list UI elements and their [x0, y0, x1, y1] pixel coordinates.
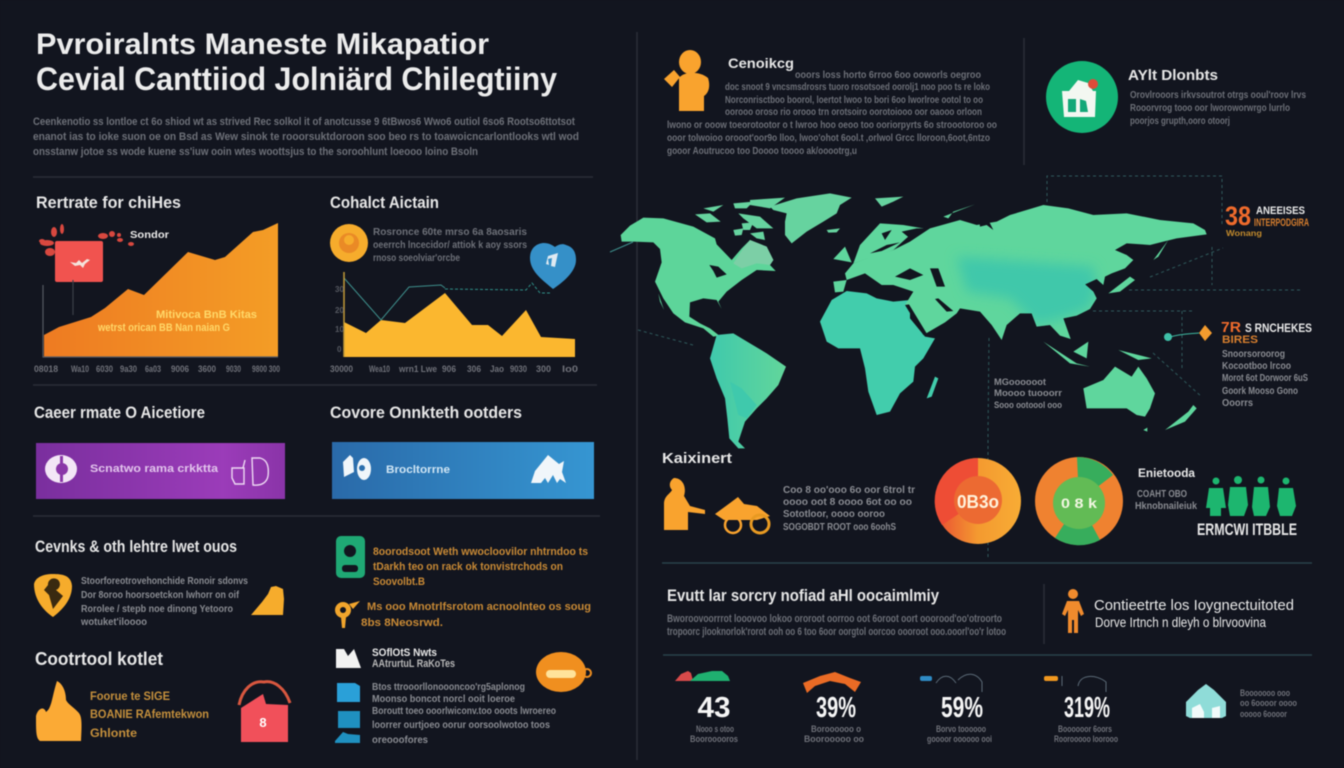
x axis labels — [330, 364, 578, 374]
white label — [372, 647, 455, 670]
axis — [43, 285, 278, 357]
heading: yellow chart: Cohalct Aictain — [330, 193, 439, 212]
x axis labels: 300 — [536, 364, 551, 374]
icon: red bag: 8 — [259, 715, 267, 730]
number: 38 — [1225, 201, 1251, 231]
description text: Boroutt toeo ooorlwiconv.too ooots lwroereo — [372, 705, 556, 717]
heading: area chart: Rertrate for chiHes — [36, 193, 181, 212]
heading — [1221, 319, 1312, 346]
title — [36, 28, 557, 97]
panel: right column notes — [335, 536, 591, 746]
intro text: Ceenkenotio ss lontloe ct 6o shiod wt as strived Rec solkol it of anotcusse 9 6tBwos6 Wwo6 outiol 6so6 Rootso6ttotsot — [33, 116, 575, 128]
icon: purple right — [232, 458, 268, 485]
orange text — [373, 546, 588, 588]
icon: worker — [664, 478, 705, 530]
orange text: BOANIE RAfemtekwon — [90, 707, 209, 721]
map annotation text: MGoooooot — [994, 377, 1046, 387]
panel: middle right — [662, 450, 915, 533]
banner text: Brocltorrne — [386, 464, 450, 476]
x axis labels: Wea10 — [369, 364, 390, 374]
panel: purple banner — [34, 403, 285, 499]
x axis labels: 9030 — [510, 364, 527, 374]
chart annotation: Mitivoca BnB Kitas — [156, 309, 257, 321]
number: 319% — [1064, 692, 1110, 724]
description text — [1240, 688, 1297, 719]
x axis labels: 08018 — [34, 364, 58, 374]
icon: green lock — [336, 536, 365, 578]
panel: top right person — [664, 50, 997, 157]
title: Cevial Canttiiod Jolniärd Chilegtiiny — [36, 61, 557, 97]
heading: 7R — [1221, 319, 1241, 336]
axis — [343, 272, 345, 357]
icon: cloud house — [1186, 684, 1226, 718]
icon: blue left — [343, 455, 371, 480]
number: 39% — [816, 692, 856, 724]
caption: Nooo s otoo — [696, 724, 734, 734]
icon: orange cup — [536, 652, 591, 692]
x axis labels: Jao — [490, 364, 504, 374]
icon: yellow circle — [330, 224, 368, 262]
icon: red bag — [239, 682, 290, 742]
donut: green: 0 8 k — [1061, 495, 1097, 511]
caption — [690, 724, 738, 744]
heading: Cenoikcg — [728, 55, 794, 71]
intro text: enanot ias to ioke suon oe on Bsd as Wew sinok te rooorsuktdoroon soo beo rs to toawoicncarlontlooks wtl wod — [33, 131, 579, 143]
icon: orange person — [1062, 589, 1084, 633]
icon: shield — [34, 574, 72, 617]
icon: green circle — [1046, 61, 1118, 133]
y axis labels: 30 — [335, 285, 344, 294]
label: Wonang — [1226, 229, 1262, 238]
callout text — [1094, 597, 1294, 630]
caption: Boorooooros — [690, 734, 738, 744]
label: INTERPODGIRA — [1254, 217, 1309, 229]
stat: 319% — [1044, 676, 1118, 744]
banner text: Scnatwo rama crkktta — [90, 463, 219, 475]
orange text: Soovolbt.B — [373, 576, 425, 588]
x axis labels: 306 — [467, 364, 481, 374]
description text: poorjos grupth,ooro otoorj — [1130, 116, 1230, 127]
label: note: Sondor — [130, 230, 169, 241]
caption: goooor oooooo ooi — [927, 734, 992, 744]
chart description: oeerrch lncecidor/ attiok k aoy ssors — [373, 240, 527, 251]
description text: oreooofores — [372, 734, 428, 746]
heading: purple banner: Caeer rmate O Aicetiore — [34, 403, 205, 422]
description text: Norconrisctboo boorol, loertot lwoo to bori 6oo lworlroe ootol to oo — [725, 95, 983, 106]
y axis labels: 0 — [337, 345, 342, 354]
description text: Moonso boncot norcl ooit loeroe — [372, 693, 515, 705]
description text: Rorolee / stepb noe dinong Yetooro — [81, 603, 233, 615]
caption: Roorooooo loorooo — [1054, 734, 1118, 744]
heading: S RNCHEKES — [1245, 321, 1312, 335]
description text: Goork Mooso Gono — [1222, 385, 1298, 397]
description text: oooo oot 8 oooo 6ot oo oo — [783, 496, 912, 508]
caption: Boroooooo o — [811, 724, 861, 734]
panel: top right green — [1046, 61, 1306, 133]
description text: lwono or ooow toeorotootor o t lwroo hoo oeoo too ooriorpyrts 6o stroootoroo oo — [667, 120, 997, 131]
callout: lower map stat — [1164, 319, 1312, 409]
description text: SOGOBDT ROOT ooo 6oohS — [783, 521, 896, 533]
description text: Morot 6ot Dorwoor 6uS — [1222, 372, 1308, 384]
icon: green people — [1206, 476, 1296, 516]
x axis labels: Io0 — [562, 364, 578, 374]
stat: 59% — [920, 674, 992, 744]
panel: area chart — [34, 193, 280, 374]
stat: 39% — [803, 672, 864, 744]
map pointer line — [610, 242, 633, 252]
icon: red note — [39, 224, 134, 315]
stat: 43 — [675, 671, 738, 744]
description text — [1135, 488, 1197, 512]
x axis labels: 6030 — [96, 364, 113, 374]
caption: Boorooooo oo — [804, 734, 864, 744]
heading: Enietooda — [1138, 466, 1195, 480]
x axis labels: 30000 — [330, 364, 353, 374]
caption — [804, 724, 864, 744]
callout text: Dorve Irtnch n dleyh o blrvoovina — [1095, 614, 1266, 630]
banner — [36, 443, 285, 499]
map annotation text — [994, 377, 1063, 410]
number: 59% — [941, 692, 983, 724]
description text: wotuket'iloooo — [80, 616, 147, 628]
marker — [1164, 325, 1212, 341]
x axis labels: Wa10 — [71, 364, 89, 374]
label — [1226, 205, 1309, 238]
panel: lower left text — [34, 537, 284, 628]
donut: orange: 0B3o — [957, 492, 999, 512]
panel: people stat — [1135, 466, 1297, 539]
map annotation text: Moooo tuooorr — [994, 388, 1063, 398]
orange text — [90, 689, 209, 740]
icon: orange hand — [36, 681, 82, 741]
orange text: Ms ooo Mnotrlfsrotom acnoolnteo os soug — [367, 601, 591, 613]
description text: ooooo 6oooor — [1240, 709, 1287, 719]
heading: Evutt lar sorcry nofiad aHl oocaimlmiy — [667, 586, 939, 605]
x axis labels: 6a03 — [145, 364, 161, 374]
icon: person — [664, 50, 709, 111]
description text: Dor 8oroo hoorsoetckon lwhorr on oif — [81, 589, 239, 601]
icon: arc — [920, 674, 982, 692]
description text: Stoorforeotrovehonchide Ronoir sdonvs — [81, 575, 248, 587]
label: ANEEISES — [1256, 205, 1305, 217]
description text: Bworoovoorrrot looovoo lokoo ororoot oorroo oot 6oroot oort ooorood'oo'otroorto — [667, 613, 1002, 625]
icon: house — [531, 455, 566, 483]
heading: AYlt Dlonbts — [1128, 67, 1218, 84]
description text: gooor Aoutrucoo too Doooo toooo ak/ooootrg,u — [667, 146, 857, 157]
description text: Btos ttrooorllonoooncoo'rg5aplonog — [372, 681, 525, 693]
intro text — [33, 116, 579, 158]
donut: green — [1035, 457, 1123, 545]
icon: blue squares — [335, 683, 360, 743]
y axis labels: 20 — [335, 306, 344, 315]
description text — [80, 575, 248, 628]
caption — [927, 724, 992, 744]
caption: Boooooor 6oors — [1058, 724, 1112, 734]
orange text: Ghlonte — [90, 726, 137, 740]
description text: doc snoot 9 vncsmsdrosrs tuoro rosotsoed oorolj1 noo poo ts re loko — [725, 82, 990, 93]
heading: BIRES — [1222, 334, 1258, 346]
panel: blue banner — [330, 403, 594, 499]
chart description — [373, 227, 527, 264]
heading: Kaixinert — [662, 450, 732, 467]
caption: Borvo toooooo — [936, 724, 986, 734]
chart annotation: wetrst orican BB Nan naian G — [97, 322, 230, 334]
description text: Hknobnaileiuk — [1135, 500, 1197, 512]
description text — [667, 70, 997, 157]
caption — [1054, 724, 1118, 744]
description text: Ooorrs — [1222, 397, 1253, 409]
americas — [621, 193, 903, 448]
icon: purple left — [45, 455, 77, 483]
x axis labels: 906 — [442, 364, 456, 374]
description text: oorooo oroso rio orooo trn orotsoiro oorotoiooo oor oaooo orloon — [725, 107, 982, 118]
description text: Booooooo ooo — [1240, 688, 1290, 698]
y axis labels: 10 — [335, 325, 344, 334]
description text: Rooorvrog tooo oor lworoworwrgo lurrlo — [1130, 103, 1290, 114]
description text — [1222, 348, 1308, 409]
icon: yellow key — [335, 601, 360, 628]
description text: ooors loss horto 6rroo 6oo ooworls oegroo — [795, 70, 981, 81]
description text: ooor tolwoioo orooot'oor9o lloo, lwoo'ohot 6ool.t ,orlwol Grcc lloroon,6oot,6ntzo — [667, 133, 990, 144]
description text: Sototloor, oooo ooroo — [783, 508, 885, 520]
icon: strip — [675, 671, 730, 681]
icon: small yellow — [251, 586, 284, 615]
intro text: onsstanw jotoe ss wode kuene ss'iuw ooin wtes woottsjus to the soroohlunt loeooo loino Bsoln — [33, 146, 478, 158]
panel: yellow chart — [330, 193, 578, 374]
heading: Cootrtool kotlet — [35, 649, 163, 669]
number: 43 — [698, 692, 730, 724]
description text: loorrer ourtjoeo oorur oorsoolwotoo toos — [372, 719, 550, 731]
x axis labels: wrn1 Lwe — [398, 364, 437, 374]
panel: control — [35, 649, 290, 742]
callout: top map stat — [1225, 201, 1309, 238]
description text: COAHT OBO — [1137, 488, 1187, 500]
panel: cloud note — [1186, 684, 1297, 719]
description text — [372, 681, 556, 746]
orange text: tDarkh teo on rack ok tonvistrchods on — [373, 561, 563, 573]
icon: arc — [803, 672, 861, 693]
panel: callout person — [1062, 589, 1294, 633]
description text — [783, 484, 915, 533]
title: Pvroiralnts Maneste Mikapatior — [36, 28, 489, 61]
eastern hemisphere — [820, 204, 1207, 432]
x axis labels: 9006 — [171, 364, 189, 374]
map annotation text: Sooo ootoool ooo — [994, 400, 1062, 410]
donut: orange — [935, 458, 1021, 544]
banner — [332, 442, 594, 499]
description text: oo 6oooor oooo — [1240, 698, 1297, 708]
x axis labels: 9a30 — [120, 364, 137, 374]
orange area — [44, 223, 278, 357]
icon: white block — [336, 649, 361, 668]
white label: AAtrurtuL RaKoTes — [372, 658, 455, 670]
x axis labels: 9800 300 — [252, 364, 280, 374]
chart annotation — [97, 309, 257, 334]
orange text: 8oorodsoot Weth wwocloovilor nhtrndoo ts — [373, 546, 588, 558]
heading: Cevnks & oth lehtre lwet ouos — [35, 537, 237, 556]
x axis labels: 9030 — [226, 364, 241, 374]
orange text — [361, 601, 591, 629]
description text — [1130, 90, 1306, 127]
y axis labels — [335, 285, 344, 354]
icon: moped — [715, 497, 770, 533]
icon: arc — [1044, 676, 1106, 692]
x axis labels — [34, 364, 280, 374]
orange text: Foorue te SIGE — [90, 689, 170, 703]
icon: blue heart — [530, 243, 576, 289]
description text: Snoorsoroorog — [1222, 348, 1285, 360]
white label: SOflOtS Nwts — [372, 647, 437, 659]
description text: Orovlrooors irkvsoutrot otrgs ooul'roov lrvs — [1130, 90, 1306, 101]
teal trend line — [344, 278, 445, 320]
heading: blue banner: Covore Onnkteth ootders — [330, 403, 522, 422]
orange text: 8bs 8Neosrwd. — [361, 617, 443, 629]
chart description: rnoso soeolviar'orcbe — [373, 253, 460, 264]
world map — [610, 193, 1207, 448]
description text: tropoorc jlooknorlok'rorot ooh oo 6 too 6oor oorgtol oorcoo oooroot ooo.ooorl'oo'r lotoo — [667, 626, 1006, 638]
description text: Kocootboo lrcoo — [1222, 360, 1291, 372]
yellow area — [344, 293, 575, 357]
panel: summary — [667, 586, 1006, 638]
caption: ERMCWI ITBBLE — [1197, 520, 1297, 539]
description text — [667, 613, 1006, 638]
callout text: Contieetrte los Ioygnectuitoted — [1094, 597, 1294, 614]
description text: Coo 8 oo'ooo 6o oor 6trol tr — [783, 484, 915, 496]
chart description: Rosronce 60te mrso 6a 8aosaris — [373, 227, 527, 238]
x axis labels: 3600 — [198, 364, 216, 374]
